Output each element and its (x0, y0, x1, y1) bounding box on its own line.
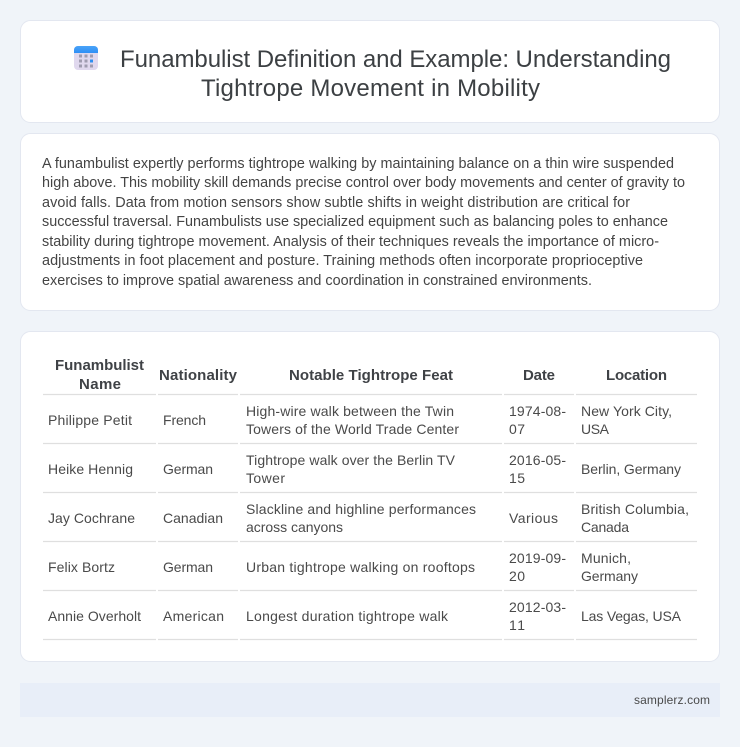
table row: Philippe Petit: USA (581, 421, 610, 437)
table row: Felix Bortz: 2019-09- (509, 550, 566, 566)
table row: Philippe Petit: New York City, (581, 403, 672, 419)
text block: description paragraph: adjustments in foot placement and posture. Training methods often incorporate proprioceptive (42, 253, 643, 269)
table row: Philippe Petit: 07 (509, 421, 525, 437)
table row: Jay Cochrane: Jay Cochrane (48, 510, 135, 526)
table row: Heike Hennig: 2016-05- (509, 452, 566, 468)
table row: Annie Overholt: 2012-03- (509, 599, 566, 615)
table row: Annie Overholt: 11 (509, 617, 525, 633)
table row: Jay Cochrane (48, 501, 689, 535)
table row: Annie Overholt (48, 599, 682, 633)
title (120, 46, 671, 102)
table row: Heike Hennig: 15 (509, 470, 525, 486)
title: Tightrope Movement in Mobility (201, 75, 540, 102)
table row: Felix Bortz: Felix Bortz (48, 559, 115, 575)
table row: Philippe Petit: Philippe Petit (48, 412, 132, 428)
panel: title card (20, 20, 720, 122)
table row: Felix Bortz: 20 (509, 568, 525, 584)
table row: Felix Bortz (48, 550, 638, 584)
panel: description (20, 134, 720, 310)
table row: Heike Hennig: Berlin, Germany (581, 461, 681, 477)
table row: Heike Hennig: Tightrope walk over the Berlin TV (246, 452, 456, 468)
table header: Funambulist (55, 357, 144, 374)
text block: description paragraph: successful traversal. Funambulists use specialized equipment such as balancing poles to enhance (42, 214, 668, 230)
table row: Felix Bortz: Urban tightrope walking on rooftops (246, 559, 475, 575)
table row: Jay Cochrane: Canada (581, 519, 629, 535)
table row: Jay Cochrane: Slackline and highline performances (246, 501, 476, 517)
table header: Name (79, 376, 121, 393)
table row: Philippe Petit: French (163, 412, 206, 428)
table row: Heike Hennig: Tower (246, 470, 285, 486)
table header: Location (606, 367, 667, 384)
table row: Felix Bortz: Germany (581, 568, 638, 584)
table row: Annie Overholt: Las Vegas, USA (581, 608, 682, 624)
footer credit: samplerz.com (634, 693, 710, 707)
text block: description paragraph (42, 156, 685, 289)
table row: Jay Cochrane: Various (509, 510, 558, 526)
table row: Philippe Petit: 1974-08- (509, 403, 566, 419)
text block: description paragraph: A funambulist expertly performs tightrope walking by maintaining balance on a thin wire suspended (42, 156, 674, 172)
text block: description paragraph: stability during tightrope movement. Analysis of their techniques reveals the importance of micro- (42, 234, 659, 250)
table row: Heike Hennig: Heike Hennig (48, 461, 133, 477)
table row: Philippe Petit: Towers of the World Trade Center (246, 421, 459, 437)
icon: calendar (74, 46, 98, 70)
table row: Jay Cochrane: Canadian (163, 510, 223, 526)
table header: Notable Tightrope Feat (289, 367, 453, 384)
table row: Philippe Petit (48, 403, 672, 437)
table row: Annie Overholt: Longest duration tightrope walk (246, 608, 449, 624)
table header: Date (523, 367, 555, 384)
panel: table card (20, 332, 720, 662)
table header: Nationality (159, 367, 238, 384)
title: Funambulist Definition and Example: Understanding (120, 46, 671, 73)
footer bar (20, 683, 720, 717)
text block: description paragraph: high above. This mobility skill demands precise control over body movements and center of gravity to (42, 175, 685, 191)
text block: description paragraph: avoid falls. Data from motion sensors show subtle shifts in weight distribution are critical for (42, 195, 630, 211)
table row: Felix Bortz: Munich, (581, 550, 631, 566)
table header (55, 357, 667, 393)
table row: Annie Overholt: American (163, 608, 224, 624)
table grid lines (43, 394, 697, 640)
text block: description paragraph: exercises to improve spatial awareness and coordination in constrained environments. (42, 273, 592, 289)
table row: Felix Bortz: German (163, 559, 213, 575)
table row: Jay Cochrane: British Columbia, (581, 501, 689, 517)
table row: Philippe Petit: High-wire walk between the Twin (246, 403, 454, 419)
table row: Jay Cochrane: across canyons (246, 519, 343, 535)
table row: Annie Overholt: Annie Overholt (48, 608, 141, 624)
table row: Heike Hennig (48, 452, 681, 486)
table row: Heike Hennig: German (163, 461, 213, 477)
